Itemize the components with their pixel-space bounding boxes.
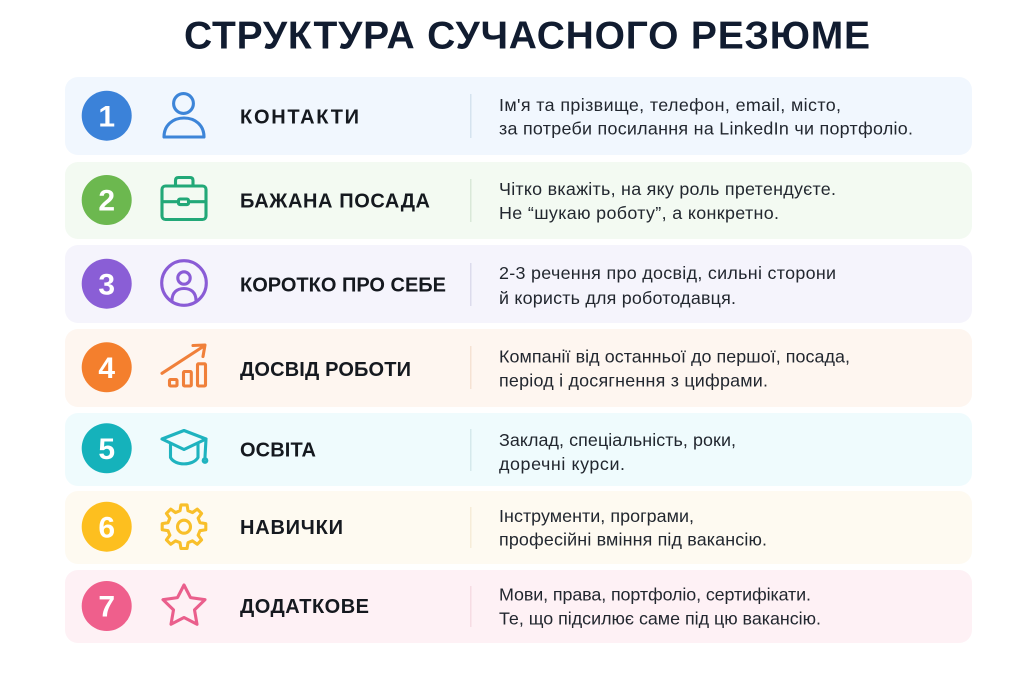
panel: row 6 skills: професійні вміння під вакансію. [499, 530, 767, 550]
panel: row 3 about [65, 245, 972, 323]
panel: row 7 additional: 7 [98, 591, 115, 624]
panel: row 4 work experience: період і досягнення з цифрами. [499, 371, 768, 391]
panel: row 2 desired position: Чітко вкажіть, на яку роль претендуєте. [499, 179, 836, 199]
panel: row 6 skills [65, 491, 972, 564]
panel: row 7 additional: Те, що підсилює саме під цю вакансію. [499, 609, 821, 629]
panel: row 2 desired position [65, 162, 972, 239]
panel: row 5 education: 5 [98, 433, 115, 466]
panel: row 2 desired position: Не “шукаю роботу”, а конкретно. [499, 203, 779, 223]
panel: row 3 about: й користь для роботодавця. [499, 288, 736, 308]
panel: row 5 education: Заклад, спеціальність, роки, [499, 430, 736, 450]
panel: row 6 skills: НАВИЧКИ [240, 517, 343, 539]
panel: row 7 additional: ДОДАТКОВЕ [240, 596, 369, 618]
panel: row 2 desired position: БАЖАНА ПОСАДА [240, 191, 430, 213]
panel: row 1 contacts: за потреби посилання на LinkedIn чи портфоліо. [499, 118, 913, 138]
panel: row 2 desired position: 2 [98, 185, 115, 218]
panel: row 5 education: ОСВІТА [240, 440, 316, 462]
panel: row 5 education [65, 413, 972, 486]
panel: row 6 skills: 6 [98, 511, 115, 544]
panel: row 4 work experience: Компанії від останньої до першої, посада, [499, 347, 850, 367]
title: СТРУКТУРА СУЧАСНОГО РЕЗЮМЕ [184, 14, 870, 58]
panel: row 3 about: 3 [98, 268, 115, 301]
panel: row 5 education: доречні курси. [499, 454, 625, 474]
panel: row 1 contacts: 1 [98, 100, 115, 133]
panel: row 4 work experience [65, 329, 972, 407]
panel: row 4 work experience: ДОСВІД РОБОТИ [240, 359, 411, 381]
panel: row 7 additional: Мови, права, портфоліо, сертифікати. [499, 585, 811, 605]
panel: row 6 skills: Інструменти, програми, [499, 506, 694, 526]
panel: row 1 contacts: Ім'я та прізвище, телефон, email, місто, [499, 95, 841, 115]
panel: row 4 work experience: 4 [98, 352, 115, 385]
panel: row 7 additional [65, 570, 972, 643]
panel: row 3 about: КОРОТКО ПРО СЕБЕ [240, 275, 446, 297]
panel: row 1 contacts: КОНТАКТИ [240, 106, 359, 128]
panel: row 3 about: 2-3 речення про досвід, сильні сторони [499, 263, 836, 283]
panel: row 1 contacts [65, 77, 972, 155]
